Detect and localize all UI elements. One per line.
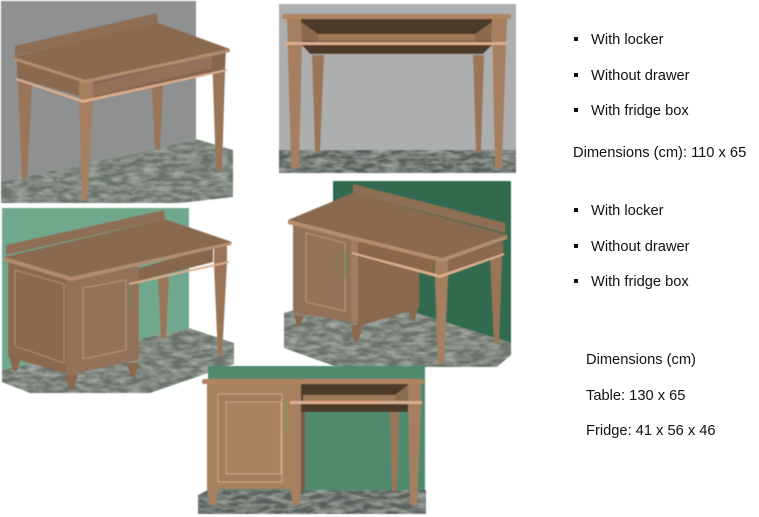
door handle (345, 251, 347, 278)
top edge (13, 57, 85, 83)
floor (2, 328, 234, 393)
wall (333, 181, 511, 343)
wall (1, 1, 196, 182)
cabinet side (8, 260, 72, 375)
feature list: first desk: With fridge box (591, 103, 689, 119)
feature list: second desk (574, 203, 690, 290)
tabletop edge (202, 379, 424, 384)
back right leg (152, 85, 163, 150)
left leg (18, 80, 32, 180)
dimensions: second desk: Table: 130 x 65 (586, 388, 685, 404)
right leg (490, 252, 502, 343)
right apron (447, 241, 503, 273)
tabletop (13, 23, 230, 80)
front leg (435, 258, 448, 364)
apron and shelf (17, 52, 225, 100)
backsplash (15, 13, 158, 56)
door (306, 233, 345, 311)
door handle (128, 284, 130, 308)
cabinet legs (207, 489, 301, 505)
scene: desk with locker, right perspective on dark green wall (284, 181, 511, 367)
feet (9, 357, 139, 390)
scene: plain desk, perspective on grey wall (1, 1, 233, 203)
tabletop edge (282, 14, 511, 19)
back legs (312, 55, 484, 152)
door (83, 280, 126, 359)
cabinet front (78, 266, 139, 373)
scene: desk with locker, left perspective on light green wall (2, 208, 234, 393)
floor (1, 139, 233, 203)
rail (290, 401, 422, 404)
feet (294, 306, 418, 342)
wall (279, 4, 516, 150)
cabinet corner post (66, 278, 78, 375)
backsplash (6, 210, 165, 255)
scene: plain desk, front view on grey wall (279, 4, 516, 173)
backsplash (353, 184, 505, 233)
door (218, 394, 282, 482)
right front leg (408, 383, 421, 505)
back right leg (390, 412, 399, 491)
feature list: second desk: With fridge box (591, 274, 689, 290)
dimensions: second desk: Dimensions (cm) (586, 352, 696, 368)
dimensions: second desk (586, 352, 716, 439)
feature list: first desk: With locker (591, 32, 664, 48)
rail (352, 252, 504, 278)
floor (279, 150, 516, 173)
back leg (158, 277, 169, 338)
feature list: first desk (574, 32, 690, 119)
scene: desk with locker, front view on green wall (198, 366, 426, 514)
door handle (284, 401, 286, 433)
cabinet post (351, 238, 358, 325)
top edge (288, 220, 442, 262)
cabinet front (293, 223, 352, 322)
tabletop (4, 219, 232, 277)
dimensions: first desk: Dimensions (cm): 110 x 65 (573, 145, 746, 161)
right leg (214, 245, 227, 357)
top edge (4, 257, 71, 281)
feature list: second desk: With locker (591, 203, 664, 219)
floor (198, 490, 426, 514)
floor (284, 298, 511, 367)
rail (16, 69, 227, 103)
cabinet side (358, 250, 419, 325)
tabletop (288, 193, 507, 258)
rail (285, 42, 507, 45)
shelf opening (301, 19, 492, 54)
wall (2, 208, 189, 370)
cabinet body (207, 383, 301, 489)
front leg (79, 80, 93, 200)
rail (129, 261, 229, 285)
dimensions: second desk: Fridge: 41 x 56 x 46 (586, 423, 716, 439)
shelf opening (301, 383, 408, 412)
right leg (212, 50, 226, 171)
feature list: first desk: Without drawer (591, 68, 690, 84)
front legs (287, 19, 507, 168)
wall (208, 366, 425, 490)
feature list: second desk: Without drawer (591, 239, 690, 255)
open shelf (358, 240, 434, 275)
cabinet side (301, 412, 305, 490)
open shelf (139, 247, 213, 281)
